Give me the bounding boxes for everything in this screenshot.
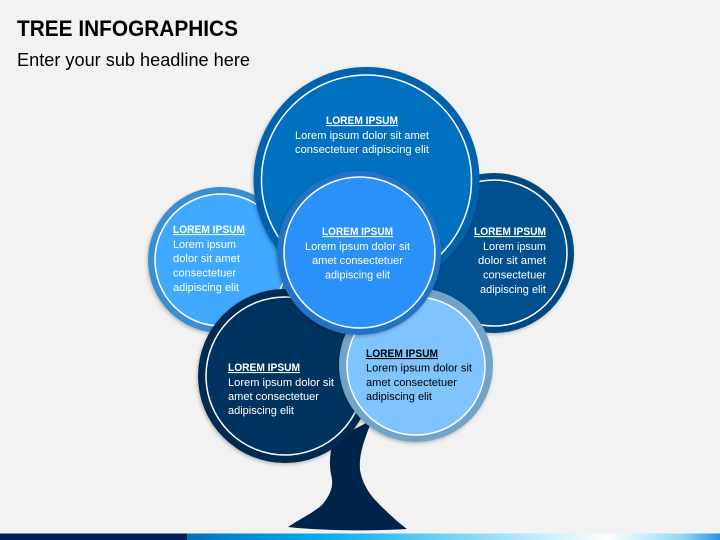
footer gradient bar (0, 534, 720, 540)
circle: bottom right light: adipiscing elit (366, 391, 432, 403)
title: TREE INFOGRAPHICS (17, 16, 238, 41)
circle: bottom left dark: amet consectetuer (228, 391, 319, 403)
circle: left: dolor sit amet (173, 253, 240, 265)
circle: right: LOREM IPSUM (474, 226, 546, 238)
circle: bottom left dark (198, 289, 372, 463)
circle: left (148, 187, 294, 333)
circle: center: adipiscing elit (325, 270, 390, 282)
circle: top: LOREM IPSUM (326, 115, 398, 127)
circle: center (277, 171, 441, 335)
circle: bottom right light (339, 288, 493, 442)
circle: top: consectetuer adipiscing elit (295, 144, 429, 156)
circle: left: LOREM IPSUM (173, 224, 245, 236)
circle: right: dolor sit amet (478, 255, 546, 267)
subtitle: Enter your sub headline here (17, 50, 250, 70)
circle: center: amet consectetuer (312, 255, 403, 267)
circle: bottom left dark: Lorem ipsum dolor sit (228, 377, 334, 389)
circle: bottom right light: amet consectetuer (366, 377, 457, 389)
circle: center: LOREM IPSUM (322, 226, 393, 238)
circle: top (254, 67, 480, 293)
circle: left: adipiscing elit (173, 282, 239, 294)
circle: right: consectetuer (483, 270, 546, 282)
circle: bottom left dark: LOREM IPSUM (228, 362, 300, 374)
circle: right (414, 173, 574, 333)
circle: bottom left dark: adipiscing elit (228, 405, 294, 417)
circle: left: consectetuer (173, 268, 236, 280)
circle: bottom right light: LOREM IPSUM (366, 348, 438, 360)
circle: right: adipiscing elit (480, 284, 546, 296)
circle: right: Lorem ipsum (483, 241, 546, 253)
circle: top: Lorem ipsum dolor sit amet (295, 130, 429, 142)
circle: bottom right light: Lorem ipsum dolor sit (366, 362, 472, 374)
circle: center: Lorem ipsum dolor sit (305, 241, 410, 253)
tree trunk (288, 420, 407, 530)
circle: left: Lorem ipsum (173, 239, 236, 251)
